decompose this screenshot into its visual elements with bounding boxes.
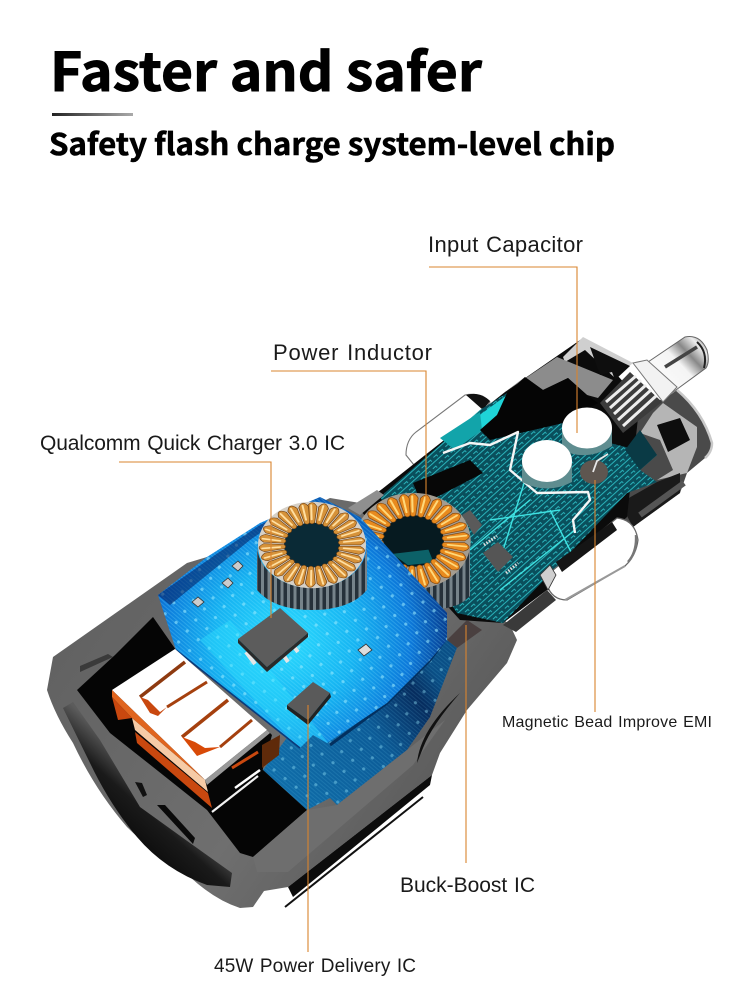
icon: magnetic bead xyxy=(580,454,608,484)
right side slit xyxy=(417,693,460,763)
icon: qualcomm toroid inductor xyxy=(257,502,367,610)
label: Power Inductor xyxy=(271,340,432,500)
panel: lower blue board xyxy=(263,640,460,810)
icon: power inductor xyxy=(355,493,471,609)
label: Buck-Boost IC: Buck-Boost IC xyxy=(400,874,535,897)
label: Magnetic Bead Improve EMI: Magnetic Bead Improve EMI xyxy=(502,714,712,731)
upper contact spring clip xyxy=(406,394,490,470)
icon: silver teeth xyxy=(590,347,630,380)
icon: black upper cavity xyxy=(480,377,598,440)
lower contact tube xyxy=(540,518,638,600)
icon: qualcomm chip xyxy=(238,608,308,672)
icon: nut collar xyxy=(633,360,677,402)
icon: USB-A port xyxy=(112,649,280,812)
bottom side slits xyxy=(285,775,432,907)
label: Power Inductor: Power Inductor xyxy=(273,340,432,365)
icon: small teal board chip xyxy=(483,536,518,573)
silver top edge xyxy=(563,337,633,378)
title underline bar xyxy=(52,113,133,116)
top rim detail xyxy=(80,654,113,672)
label: Qualcomm Quick Charger 3.0 IC: Qualcomm Quick Charger 3.0 IC xyxy=(40,432,345,455)
panel: teal circuit board xyxy=(380,393,657,623)
icon: coil spring xyxy=(600,372,662,433)
label: Input Capacitor xyxy=(428,232,583,433)
neck shell xyxy=(358,338,640,623)
label: 45W Power Delivery IC: 45W Power Delivery IC xyxy=(214,956,416,977)
icon: USB-C port xyxy=(135,782,195,844)
label: Qualcomm Quick Charger 3.0 IC xyxy=(40,432,345,618)
icon: power delivery chip xyxy=(287,682,331,725)
icon: buck-boost chip xyxy=(447,620,482,648)
title: Faster and safer xyxy=(50,31,483,107)
grey top fragment xyxy=(505,357,613,398)
icon: input capacitor xyxy=(562,408,612,455)
main lower body xyxy=(47,498,517,908)
icon: partial chip xyxy=(462,510,482,535)
icon: end cap shell xyxy=(560,390,712,527)
lower neck edge xyxy=(503,590,556,632)
white wire xyxy=(443,432,590,533)
panel: main blue board xyxy=(158,497,447,748)
subtitle: Safety flash charge system-level chip xyxy=(49,120,615,164)
label: Input Capacitor: Input Capacitor xyxy=(428,232,583,257)
car charger illustration xyxy=(47,337,712,908)
icon: second capacitor xyxy=(522,440,572,488)
crescent black strip xyxy=(63,702,232,887)
grey lower-right rim xyxy=(253,720,445,872)
icon: black clip end xyxy=(466,394,490,410)
icon: metal tip pin xyxy=(648,337,708,400)
silver wedge between inductors xyxy=(348,490,384,515)
black cavity xyxy=(77,617,307,857)
